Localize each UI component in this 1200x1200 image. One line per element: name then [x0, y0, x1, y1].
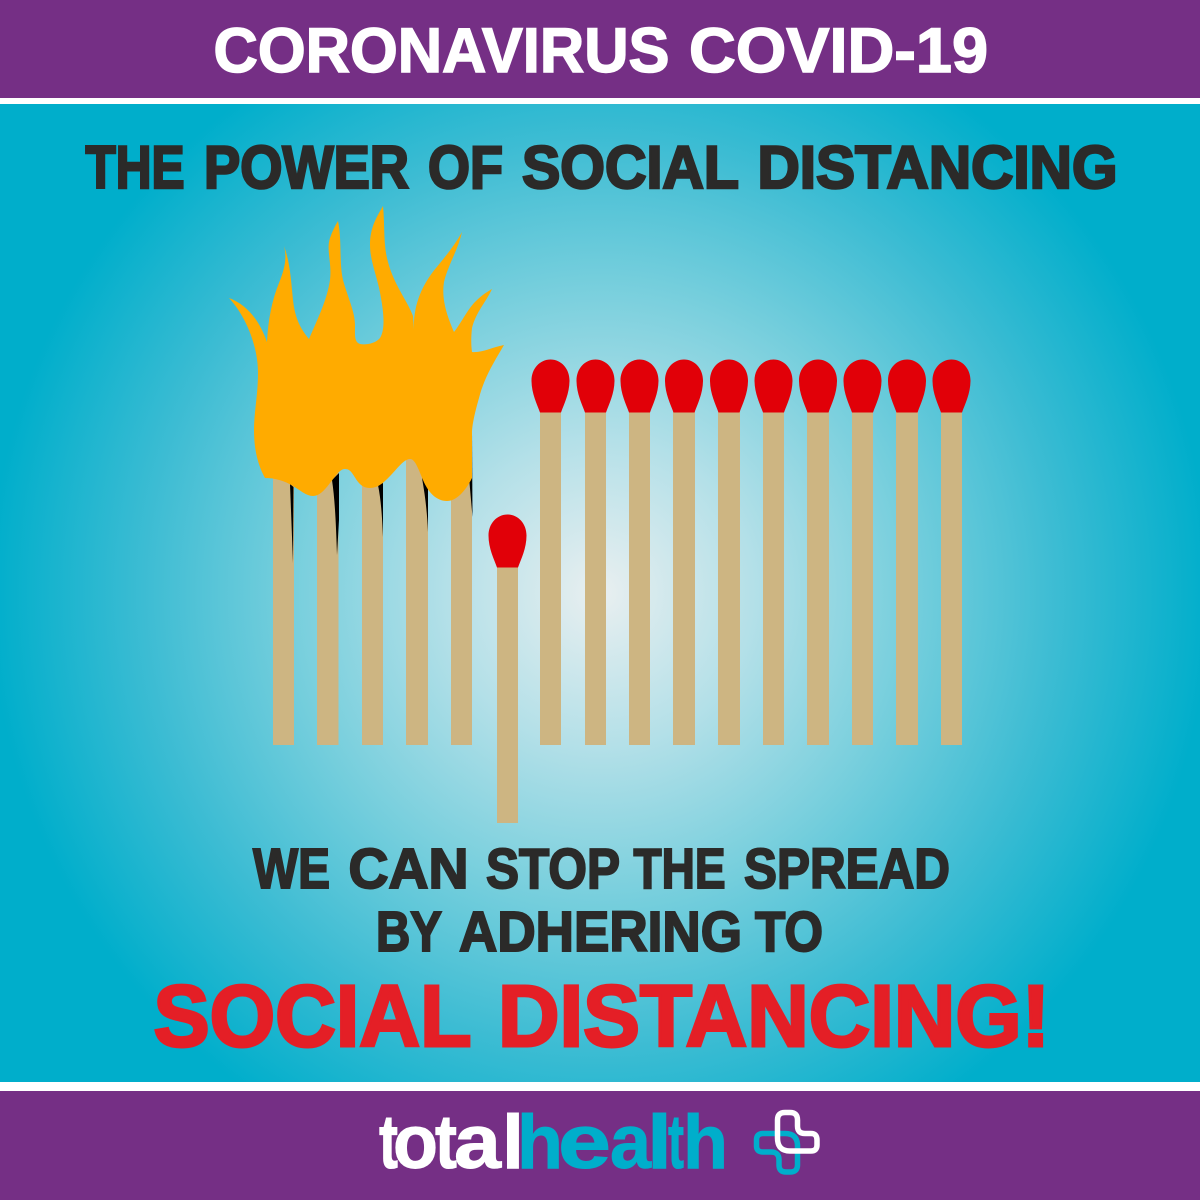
heading: the power of social distancing: POWER — [204, 134, 409, 201]
wordmark: health: e — [558, 1100, 611, 1185]
logo: totalhealth wordmark — [379, 1100, 728, 1185]
wordmark: health: a — [610, 1100, 652, 1185]
wordmark: health: l — [647, 1100, 672, 1185]
message line 2: BY — [376, 900, 442, 964]
ten unlit matches — [532, 360, 970, 745]
stick — [497, 566, 518, 823]
wordmark: health: h — [517, 1100, 563, 1185]
message line 1: THE — [634, 837, 726, 901]
footer band — [0, 1091, 1200, 1200]
call to action: social distancing: DISTANCING! — [498, 968, 1050, 1065]
message line 2: TO — [755, 900, 823, 964]
heading: the power of social distancing: SOCIAL — [522, 134, 739, 201]
message line 2: ADHERING — [459, 900, 742, 964]
wordmark: total: a — [454, 1100, 502, 1185]
header band — [0, 0, 1200, 98]
flame — [229, 206, 504, 501]
message line 2 — [376, 900, 823, 964]
sticks — [540, 411, 962, 745]
message line 1: STOP — [486, 837, 620, 901]
message line 1: SPREAD — [744, 837, 950, 901]
wordmark: health: h — [683, 1100, 728, 1185]
wordmark: total: o — [393, 1100, 438, 1185]
message line 1: CAN — [348, 837, 468, 901]
message line 1: WE — [253, 837, 330, 901]
heading: the power of social distancing: THE — [86, 134, 184, 201]
call to action: social distancing — [154, 968, 1050, 1065]
scorch marks — [290, 433, 472, 563]
title: coronavirus covid-19: CORONAVIRUS — [214, 16, 670, 86]
unlit match pulled out of line — [488, 514, 526, 823]
wordmark: health: t — [668, 1100, 684, 1185]
illustration: row of matches — [229, 206, 970, 823]
heads — [532, 360, 970, 412]
logo: interlocking cross icon — [756, 1112, 817, 1172]
match head — [488, 514, 526, 568]
heading: the power of social distancing — [86, 134, 1118, 201]
wordmark: total: t — [379, 1100, 398, 1185]
heading: the power of social distancing: OF — [428, 134, 503, 201]
burnt match sticks — [273, 450, 472, 745]
message line 1 — [253, 837, 950, 901]
heading: the power of social distancing: DISTANCING — [758, 134, 1118, 201]
wordmark: total: l — [502, 1100, 524, 1185]
wordmark: total: t — [435, 1100, 457, 1185]
title: coronavirus covid-19: COVID-19 — [689, 16, 988, 86]
title: coronavirus covid-19 — [214, 16, 988, 86]
call to action: social distancing: SOCIAL — [154, 968, 472, 1065]
